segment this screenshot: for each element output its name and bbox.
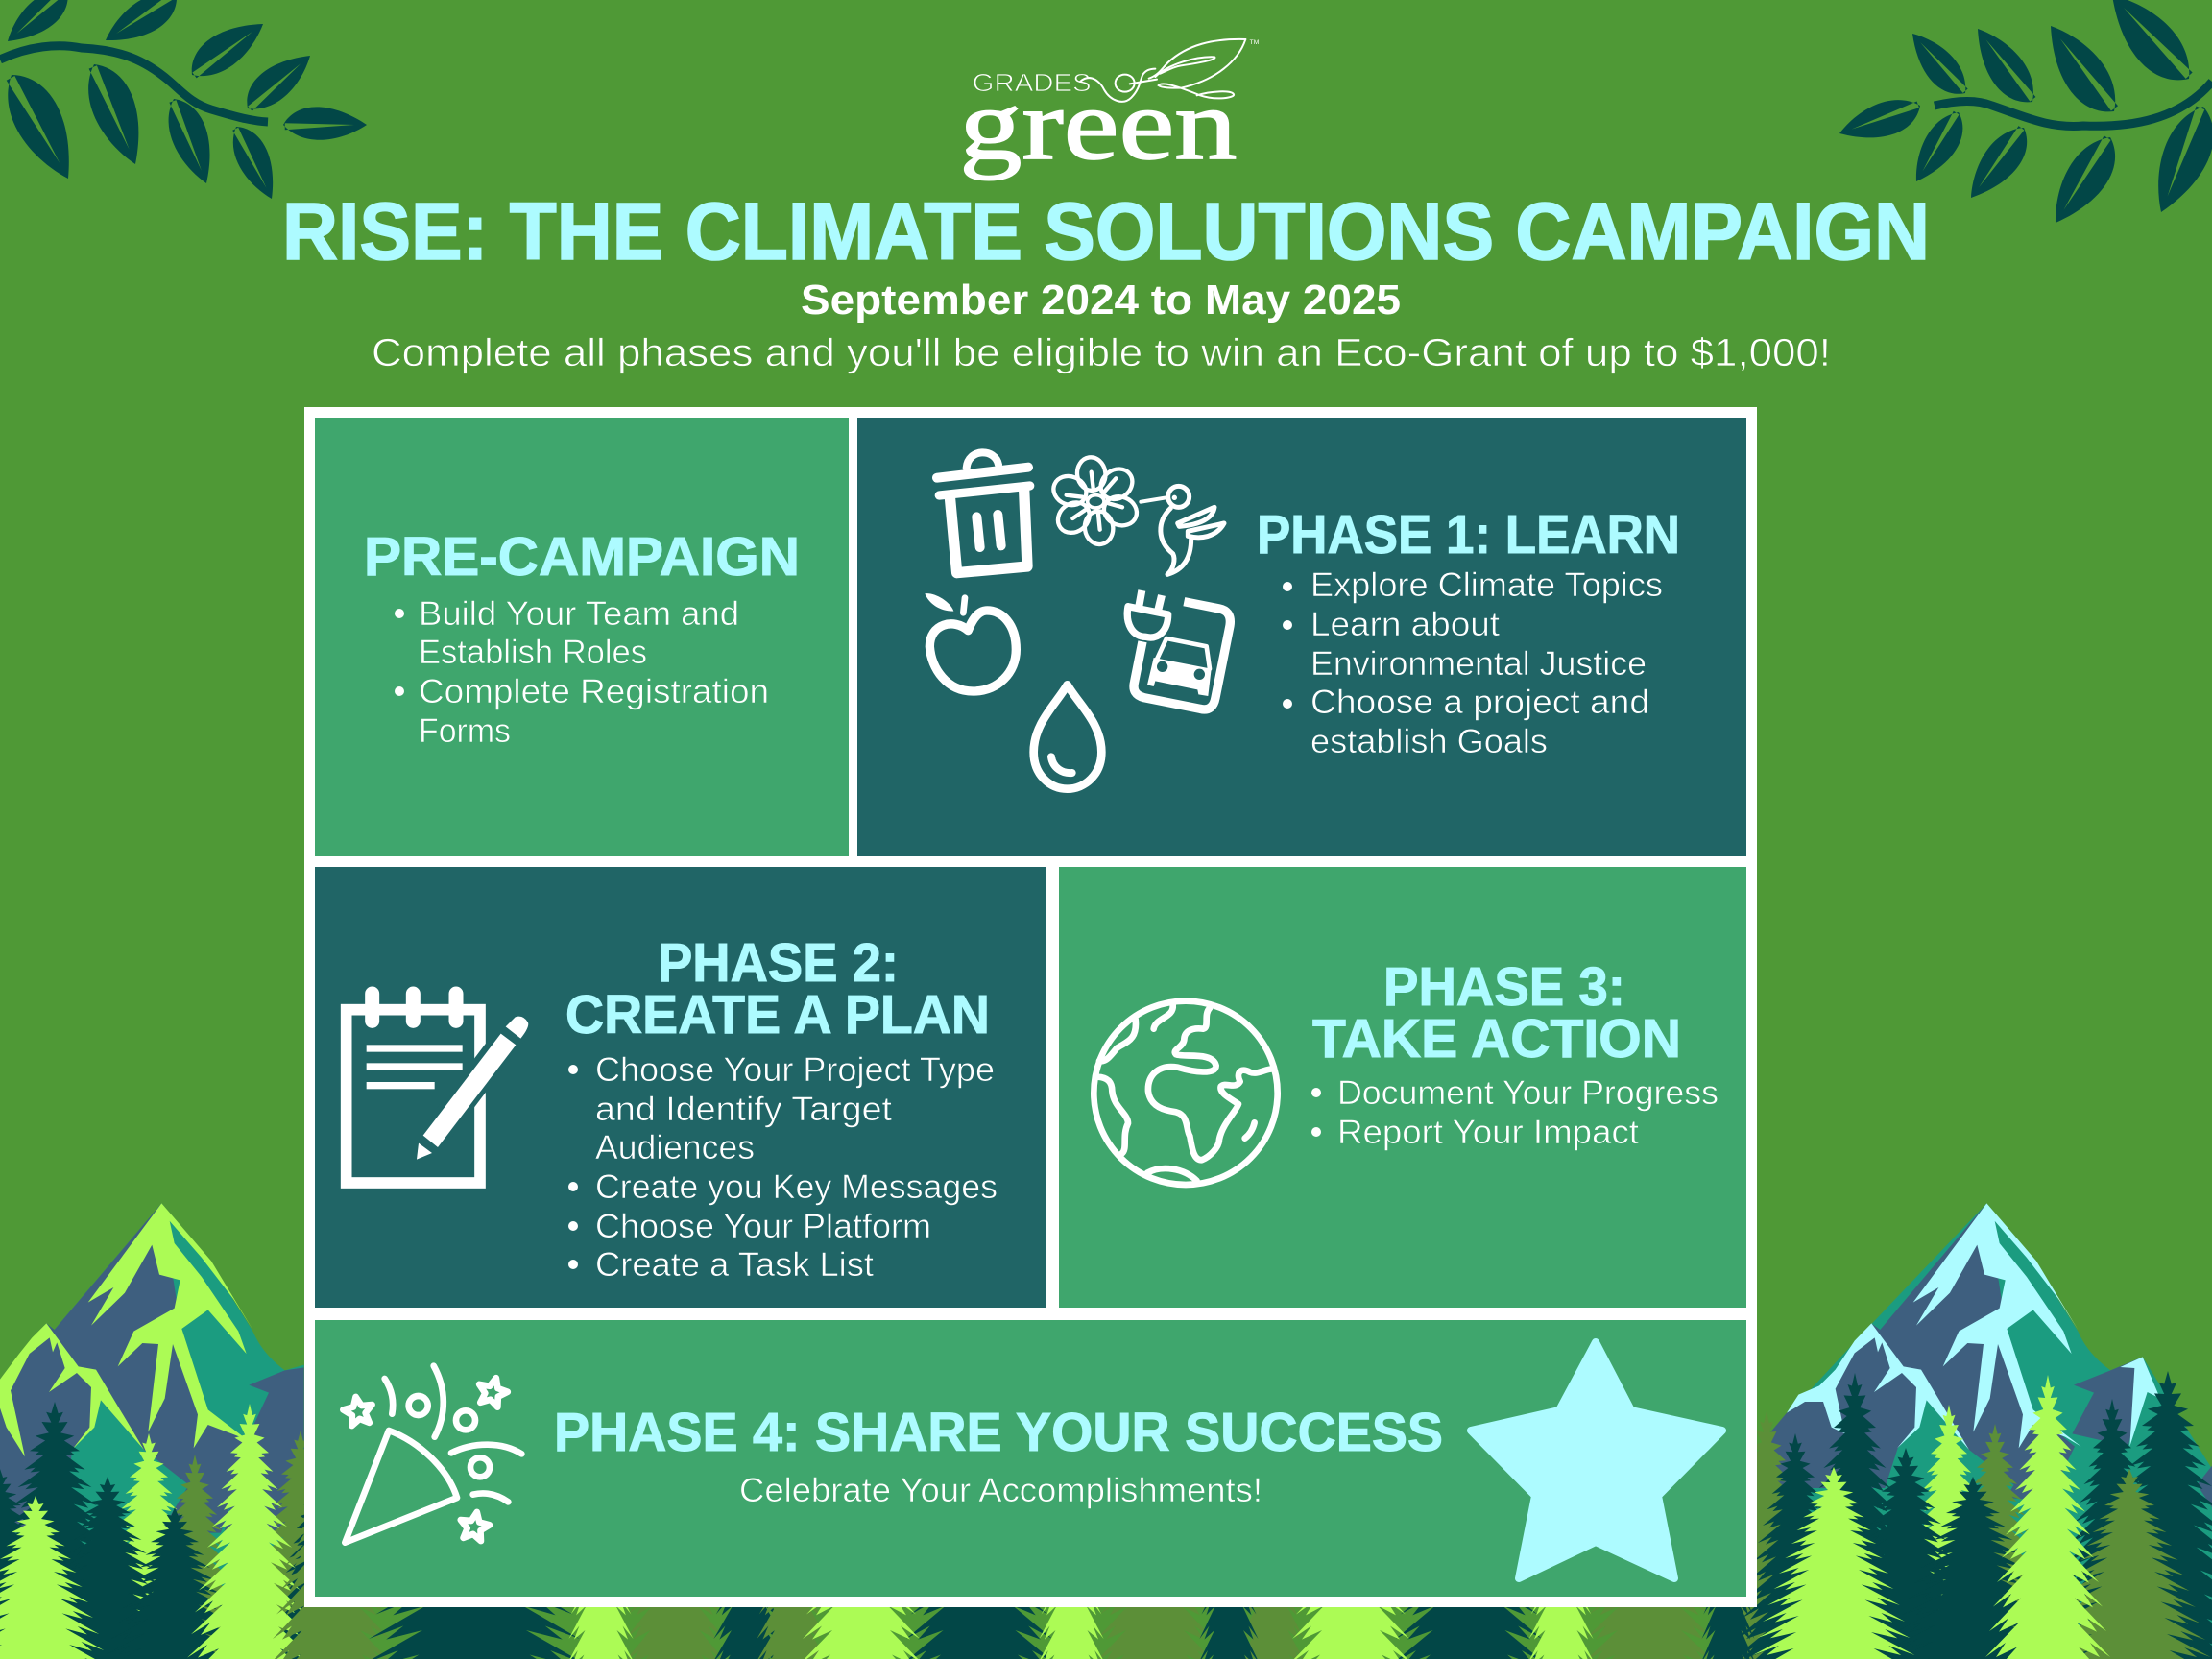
mountains and forest: right: [1701, 1203, 2212, 1659]
logo: Grades of Green: TM: [1250, 39, 1259, 46]
mountains and forest: left: [0, 1203, 366, 1659]
icon: apple: [925, 593, 1016, 691]
panel: phase 4 share your success: [315, 1320, 1746, 1597]
list: phase 3 tasks: [1311, 1074, 1719, 1151]
list: phase 2 tasks: Audiences: [595, 1129, 755, 1166]
text: celebrate: Celebrate Your Accomplishments!: [739, 1472, 1262, 1509]
logo: Grades of Green: [959, 39, 1259, 180]
icon group: climate topics: [925, 452, 1230, 789]
logo: Grades of Green: green: [959, 68, 1237, 180]
white frame: [304, 407, 1757, 1607]
list: pre-campaign tasks: Complete Registration: [419, 673, 769, 710]
title: RISE: THE CLIMATE SOLUTIONS CAMPAIGN: [282, 186, 1930, 276]
icon: water drop: [1034, 685, 1101, 789]
icon: earth globe: [1094, 1001, 1278, 1185]
panel: phase 1 learn: [857, 418, 1746, 856]
heading: phase 3: [1312, 956, 1681, 1070]
list: pre-campaign tasks: Build Your Team and: [419, 595, 739, 633]
heading: phase 2: [565, 932, 990, 1046]
list: phase 1 tasks: Environmental Justice: [1310, 645, 1647, 683]
subtitle: Complete all phases and you'll be eligible to win an Eco-Grant of up to $1,000!: [372, 330, 1831, 374]
list: phase 2 tasks: [568, 1051, 998, 1284]
heading: phase 4: PHASE 4: SHARE YOUR SUCCESS: [554, 1402, 1443, 1463]
list: phase 2 tasks: Choose Your Project Type: [595, 1051, 995, 1089]
icon: trash can: [937, 452, 1030, 573]
list: pre-campaign tasks: [395, 595, 769, 750]
heading: phase 2: CREATE A PLAN: [565, 984, 990, 1046]
icon: hummingbird: [1141, 486, 1224, 574]
list: phase 1 tasks: [1283, 566, 1663, 760]
list: phase 2 tasks: and Identify Target: [595, 1091, 892, 1128]
list: pre-campaign tasks: Establish Roles: [419, 634, 647, 671]
logo: Grades of Green: GRADES: [973, 68, 1092, 97]
branch with leaves: top left: [0, 0, 367, 205]
list: phase 2 tasks: Create you Key Messages: [595, 1168, 998, 1206]
list: phase 2 tasks: Choose Your Platform: [595, 1208, 931, 1245]
panel: phase 3 take action: [1059, 867, 1746, 1308]
list: phase 1 tasks: Learn about: [1310, 606, 1500, 643]
heading: phase 3: PHASE 3:: [1383, 956, 1625, 1018]
icon: notepad and pencil: [347, 994, 528, 1183]
panel: phase 2 create a plan: [315, 867, 1046, 1308]
list: pre-campaign tasks: Forms: [419, 712, 511, 750]
list: phase 1 tasks: Explore Climate Topics: [1310, 566, 1663, 604]
heading: pre-campaign: PRE-CAMPAIGN: [364, 526, 800, 588]
list: phase 1 tasks: Choose a project and: [1310, 684, 1649, 721]
heading: phase 2: PHASE 2:: [658, 932, 899, 994]
heading: phase 1: PHASE 1: LEARN: [1257, 504, 1680, 565]
icon: electric car: [1127, 590, 1230, 709]
panel: pre-campaign: [315, 418, 849, 856]
list: phase 1 tasks: establish Goals: [1310, 723, 1548, 760]
branch with leaves: top right: [1835, 0, 2212, 234]
list: phase 3 tasks: Document Your Progress: [1337, 1074, 1719, 1112]
list: phase 3 tasks: Report Your Impact: [1337, 1114, 1639, 1151]
icon: star: [1471, 1342, 1722, 1578]
list: phase 2 tasks: Create a Task List: [595, 1246, 874, 1284]
icon: party popper: [341, 1366, 521, 1543]
icon: flower: [1049, 455, 1141, 546]
forest strip below the panels: [266, 1382, 1758, 1659]
heading: phase 3: TAKE ACTION: [1312, 1008, 1681, 1070]
dates: September 2024 to May 2025: [801, 276, 1401, 324]
